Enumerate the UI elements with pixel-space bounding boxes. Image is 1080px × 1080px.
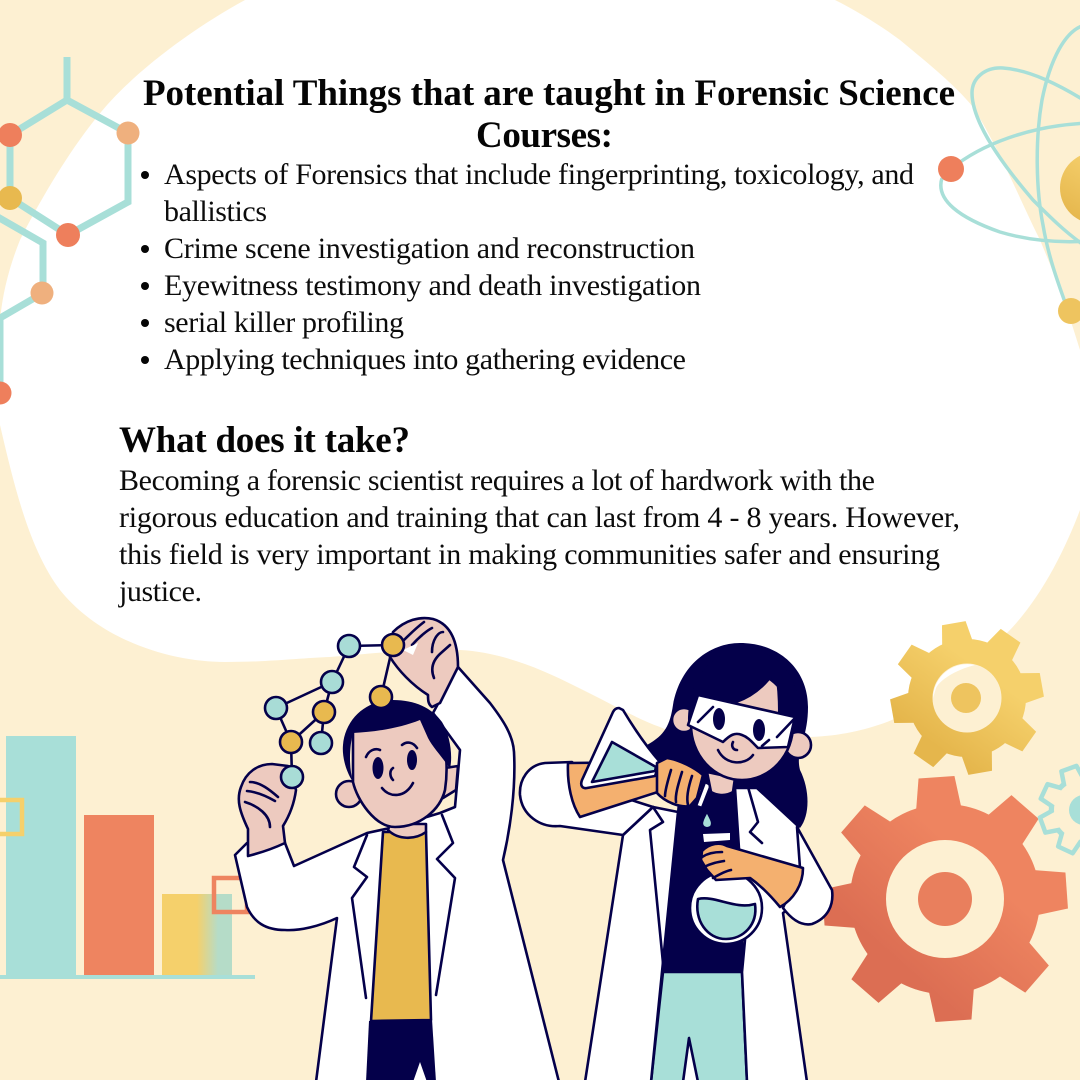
neck xyxy=(388,824,426,838)
bullet list: serial killer profiling xyxy=(164,306,404,339)
right sleeve xyxy=(783,827,832,924)
conical flask xyxy=(581,708,660,788)
lapels xyxy=(352,815,455,998)
title xyxy=(143,73,955,156)
bar: yellow xyxy=(162,894,232,976)
paragraph: this field is very important in making communities safer and ensuring xyxy=(119,538,940,571)
paragraph: rigorous education and training that can last from 4 - 8 years. However, xyxy=(119,501,960,534)
fist xyxy=(657,758,703,806)
trousers xyxy=(366,1019,436,1080)
bar: teal xyxy=(6,736,76,976)
ears xyxy=(672,708,696,732)
neck xyxy=(707,772,735,795)
round flask xyxy=(690,833,762,944)
chart baseline xyxy=(0,975,255,979)
heading: what does it take: What does it take? xyxy=(119,420,410,461)
title: Courses: xyxy=(476,115,613,156)
square outline: yellow xyxy=(0,800,22,834)
bullet list: Applying techniques into gathering evidence xyxy=(164,343,686,376)
hair front xyxy=(688,650,802,730)
bullet list: Crime scene investigation and reconstruction xyxy=(164,232,695,265)
square outline: coral xyxy=(214,878,247,912)
lapels xyxy=(650,787,762,963)
bullet list: Aspects of Forensics that include fingerprinting, toxicology, and xyxy=(164,158,914,191)
upper hand xyxy=(390,618,458,707)
paragraph: justice. xyxy=(118,575,202,608)
bullet list xyxy=(141,158,914,376)
lower hand xyxy=(239,764,296,856)
left sleeve xyxy=(520,762,653,835)
goggles xyxy=(688,695,795,750)
bar chart xyxy=(0,736,255,979)
coat xyxy=(235,667,559,1080)
hair xyxy=(343,700,451,782)
molecule model xyxy=(265,635,393,777)
shirt xyxy=(371,832,431,1021)
title: Potential Things that are taught in Forensic Science xyxy=(143,73,955,114)
bar: coral xyxy=(84,815,154,976)
coat left panel xyxy=(585,807,678,1080)
icon: atom top right xyxy=(938,25,1080,324)
bullet list: ballistics xyxy=(164,195,267,228)
hair back xyxy=(647,643,808,828)
bullet list: Eyewitness testimony and death investigation xyxy=(164,269,701,302)
coat right panel xyxy=(735,788,815,1080)
head xyxy=(353,705,447,827)
face xyxy=(691,670,793,780)
trousers xyxy=(651,972,747,1080)
illustration: female scientist xyxy=(520,643,832,1080)
illustration: male scientist xyxy=(235,618,559,1080)
right forearm and hand xyxy=(701,844,803,907)
face details xyxy=(366,743,417,795)
icon: coral gear xyxy=(824,776,1068,1022)
white blob panel xyxy=(0,0,1080,741)
paragraph xyxy=(118,464,960,608)
icon: molecule top left xyxy=(0,57,140,404)
icon: yellow gear xyxy=(890,621,1044,775)
paragraph: Becoming a forensic scientist requires a lot of hardwork with the xyxy=(119,464,875,497)
droplet xyxy=(702,811,712,828)
bottle cap xyxy=(696,782,711,808)
smile xyxy=(718,750,753,762)
left forearm xyxy=(568,762,664,817)
icon: teal outline gear xyxy=(1039,765,1080,855)
shirt xyxy=(662,785,745,972)
ears xyxy=(336,781,362,807)
